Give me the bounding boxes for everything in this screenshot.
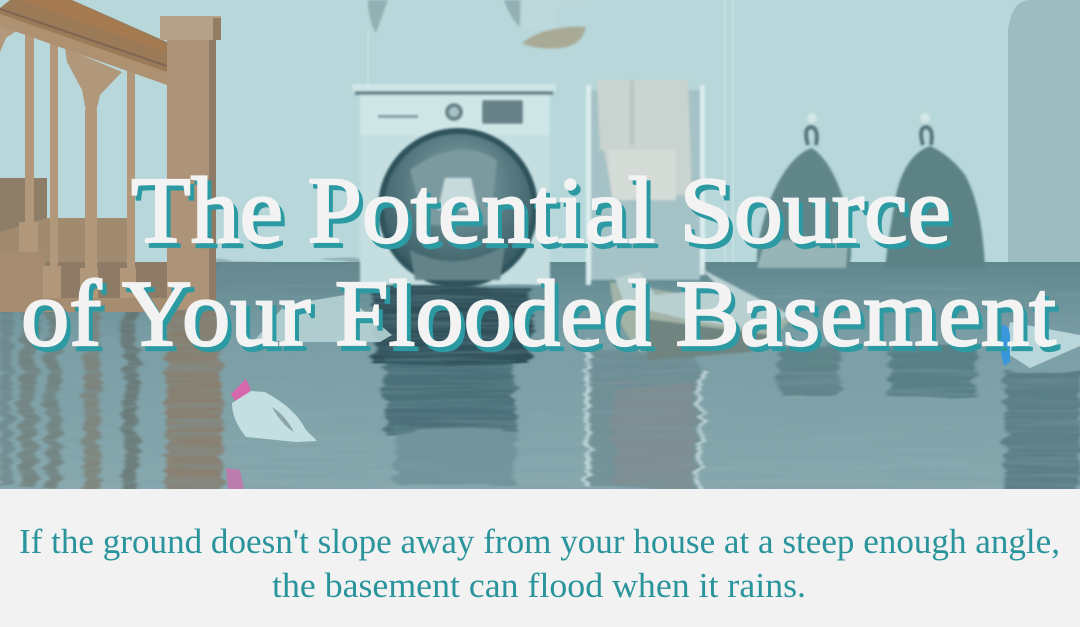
- title: of Your Flooded Basement: [21, 262, 1056, 366]
- hero photo: flooded laundry basement: [0, 0, 1080, 489]
- wooden staircase: [0, 0, 221, 312]
- water ripple texture: [0, 285, 1080, 489]
- handrail: [0, 0, 167, 85]
- back wall: [0, 0, 1080, 270]
- wall pipe and panel edges: [368, 0, 733, 262]
- newel post: [167, 40, 216, 310]
- floating mat at right: [1005, 322, 1080, 368]
- laundry bags: [757, 113, 985, 268]
- subtitle text: [19, 522, 1060, 605]
- machine body: [352, 84, 556, 285]
- towel rack and towel: [586, 80, 705, 285]
- ironing board: [1008, 0, 1080, 262]
- water: [0, 262, 1080, 489]
- floating white sheet: [255, 295, 392, 342]
- laundry basket: [610, 268, 790, 360]
- washing machine: [352, 84, 556, 288]
- subtitle text: the basement can flood when it rains.: [272, 566, 806, 605]
- reflections in water: [0, 262, 1080, 489]
- blue floating item: [1000, 325, 1010, 366]
- title: The Potential Source: [131, 159, 951, 263]
- title: [21, 159, 1056, 366]
- subtitle text: If the ground doesn't slope away from your house at a steep enough angle,: [19, 522, 1060, 561]
- detergent bottle: [226, 379, 317, 489]
- hanging items at top: [368, 0, 590, 48]
- balusters: [0, 18, 136, 298]
- subtitle panel: [0, 489, 1080, 627]
- stair treads: [0, 178, 167, 312]
- washing machine door: [378, 128, 538, 288]
